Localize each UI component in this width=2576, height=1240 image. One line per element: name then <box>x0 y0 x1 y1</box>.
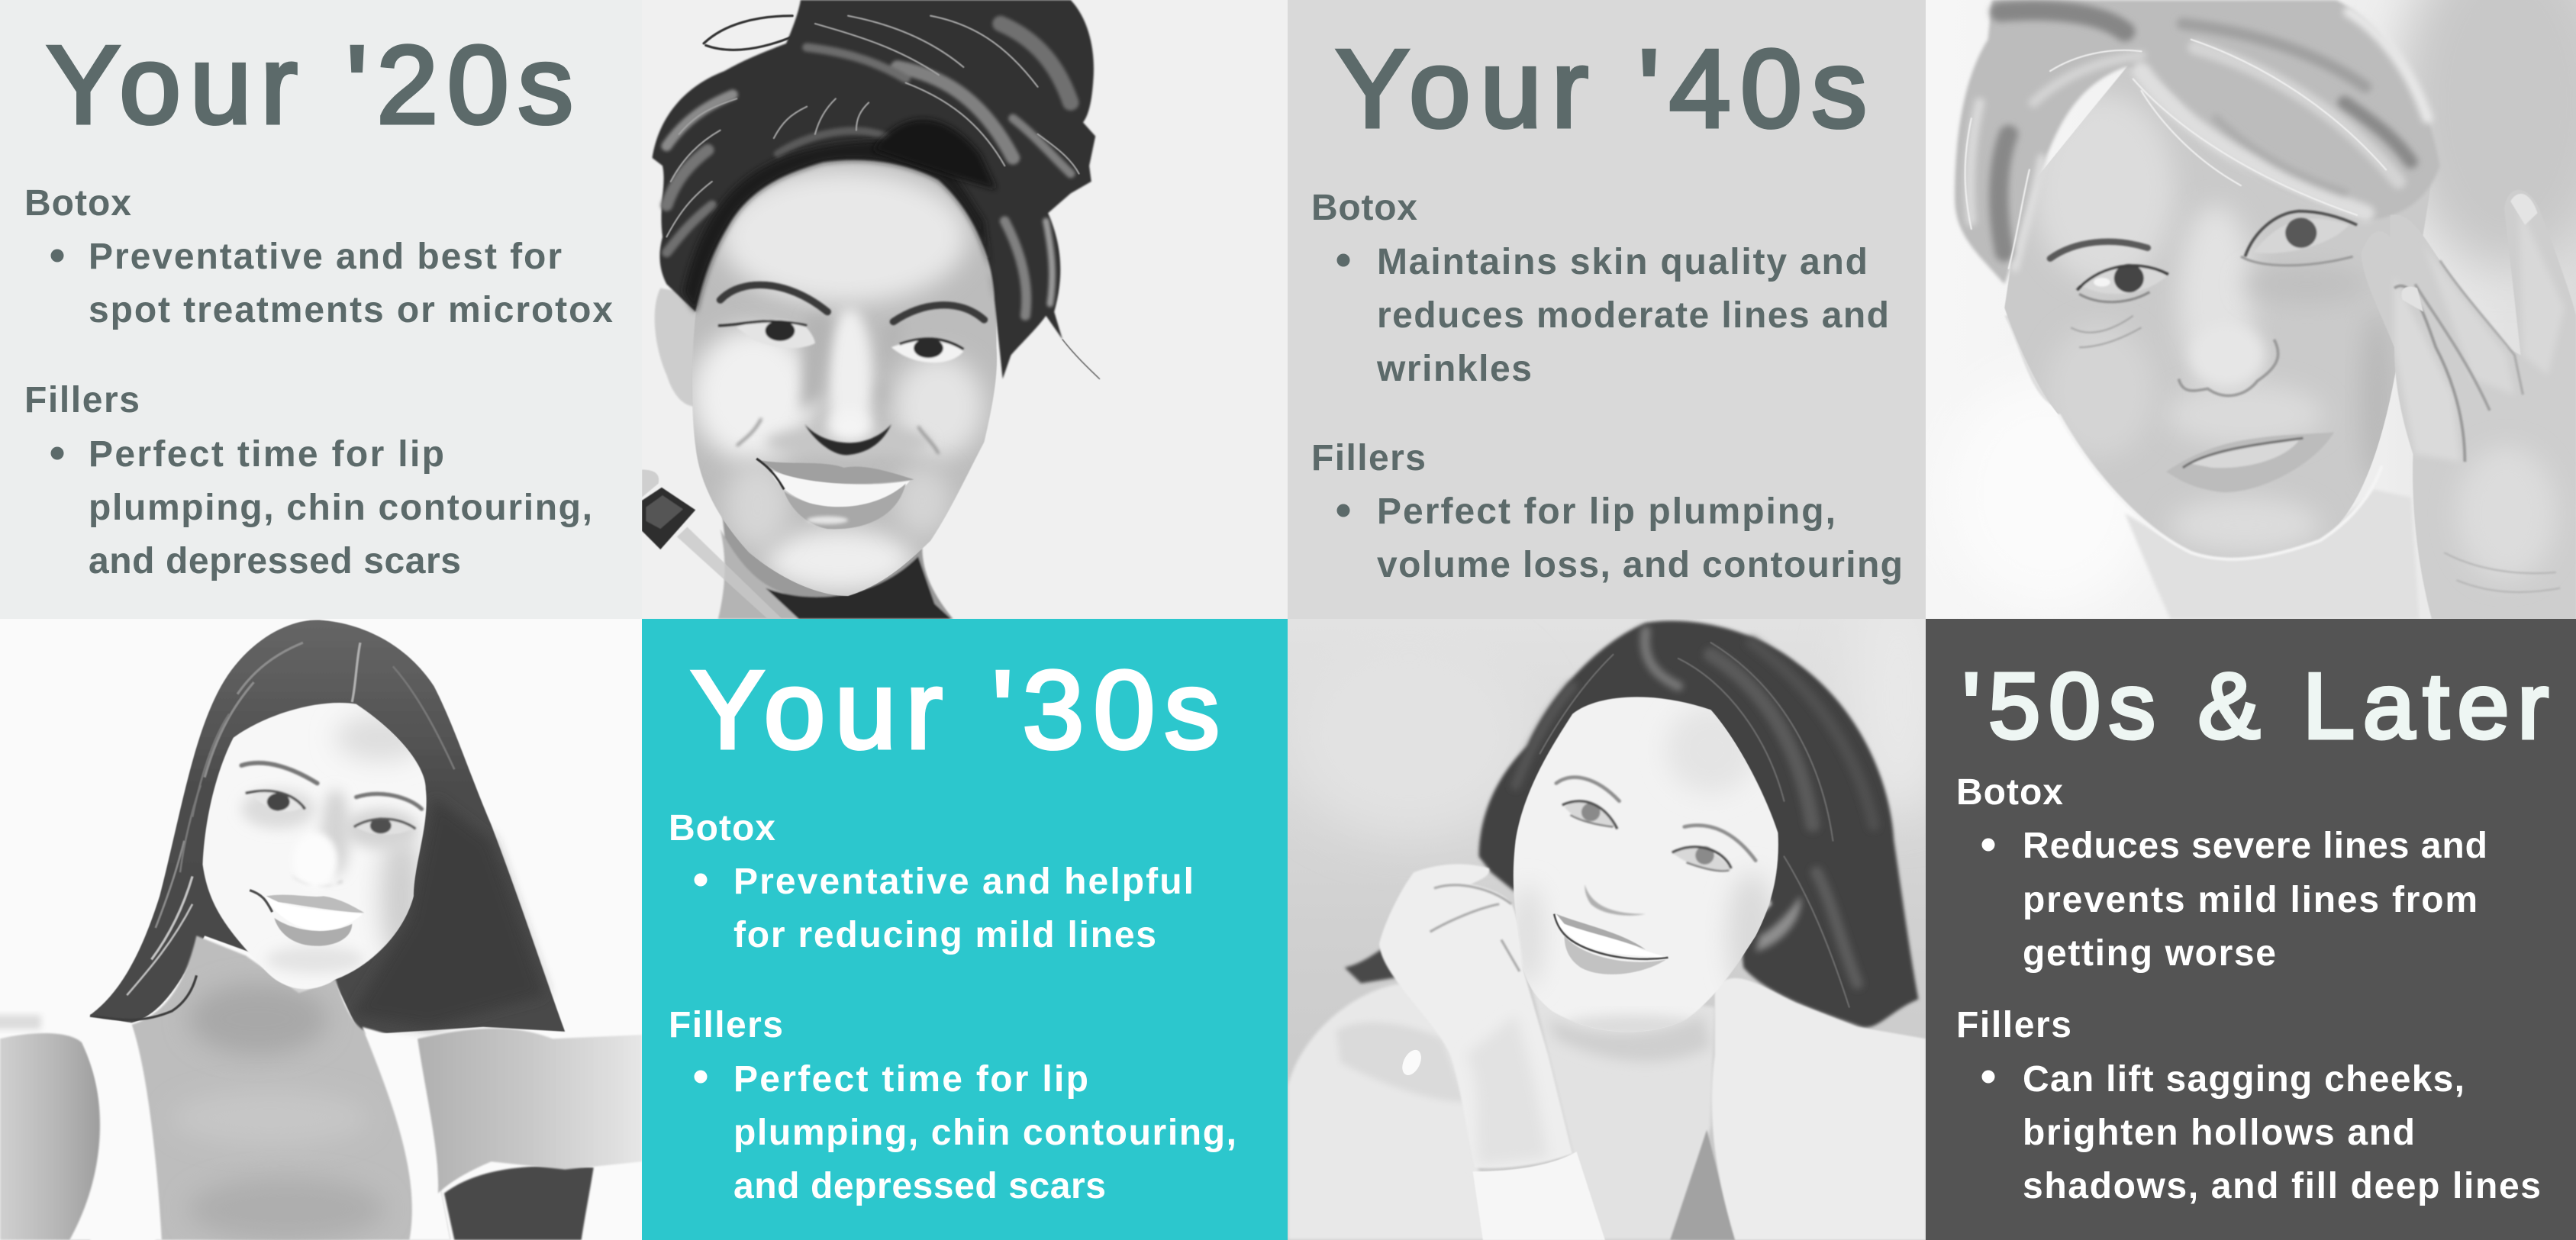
heading: Your '40s: Your '40s <box>1336 27 1867 150</box>
left arm <box>0 1033 103 1240</box>
patterned top <box>1670 1130 1735 1240</box>
Botox section: Preventative and best for <box>89 237 562 277</box>
Fillers section: Fillers <box>1956 1005 2071 1045</box>
eyes <box>246 791 415 835</box>
hand <box>2362 190 2576 619</box>
Fillers section <box>1956 1005 2541 1206</box>
eyes <box>1562 801 1731 871</box>
eyebrows <box>721 285 984 322</box>
raised hand <box>1379 864 1572 1168</box>
hair <box>1955 0 2440 284</box>
smile <box>756 459 914 529</box>
Botox section: prevents mild lines from <box>2023 880 2478 920</box>
face <box>1511 697 1778 1039</box>
Botox section: Botox <box>24 183 131 224</box>
eyebrows <box>241 763 421 809</box>
Botox section: Reduces severe lines and <box>2023 826 2487 866</box>
smile <box>1554 914 1668 974</box>
sweater cuff <box>1473 1151 1605 1240</box>
heading: Your '30s: Your '30s <box>691 648 1220 771</box>
photo: young woman with long straight hair <box>0 620 642 1240</box>
ear <box>655 288 704 407</box>
Fillers section: Perfect for lip plumping, <box>1377 491 1836 532</box>
Botox section: wrinkles <box>1376 349 1532 389</box>
panel: Your '40s <box>1288 0 1926 619</box>
Botox section: spot treatments or microtox <box>89 290 613 330</box>
panel: '50s & Later <box>1926 619 2576 1240</box>
panel: Your '20s <box>0 0 642 619</box>
Botox section <box>669 808 1194 955</box>
Fillers section <box>669 1005 1236 1206</box>
Fillers section: plumping, chin contouring, <box>733 1113 1236 1153</box>
tank top straps <box>69 1023 450 1240</box>
face <box>202 703 427 989</box>
ear <box>2004 312 2059 407</box>
neck <box>2125 489 2420 619</box>
cardigan left <box>1288 984 1605 1240</box>
Fillers section: volume loss, and contouring <box>1377 545 1903 585</box>
mouth <box>2166 432 2334 492</box>
nose <box>2178 324 2278 395</box>
hair wisp <box>1345 939 1410 984</box>
dropper <box>642 469 782 619</box>
neck <box>718 513 953 619</box>
eyes <box>2077 211 2357 302</box>
Botox section: getting worse <box>2023 933 2276 974</box>
Fillers section: brighten hollows and <box>2023 1113 2415 1153</box>
Fillers section: Fillers <box>669 1005 783 1045</box>
face <box>2004 40 2432 559</box>
long hair <box>90 620 565 1035</box>
face <box>692 159 997 596</box>
Fillers section: and depressed scars <box>89 541 461 581</box>
Fillers section: plumping, chin contouring, <box>89 488 592 528</box>
lower hand with ring <box>1336 1023 1467 1102</box>
Botox section: Botox <box>1311 188 1417 228</box>
hair bun <box>653 0 1100 379</box>
nose <box>1585 884 1646 916</box>
Fillers section: Fillers <box>1311 438 1426 478</box>
Fillers section: Perfect time for lip <box>733 1059 1088 1100</box>
Fillers section: Fillers <box>24 380 140 420</box>
photo: young woman with hair bun and dropper <box>642 0 2143 619</box>
Fillers section: and depressed scars <box>733 1166 1106 1206</box>
heading: Your '20s: Your '20s <box>47 23 573 147</box>
right arm <box>418 1029 642 1193</box>
Botox section: reduces moderate lines and <box>1377 295 1889 336</box>
Botox section <box>24 183 613 330</box>
Fillers section <box>24 380 592 581</box>
hair under arm <box>444 1166 594 1240</box>
nose <box>804 411 891 455</box>
neck <box>1532 987 1715 1240</box>
Botox section: Maintains skin quality and <box>1377 242 1868 282</box>
Fillers section: Perfect time for lip <box>89 434 444 475</box>
nose <box>291 833 342 888</box>
dark bob hair <box>1479 621 1918 1027</box>
Botox section <box>1956 772 2487 974</box>
Botox section: Botox <box>669 808 775 849</box>
Botox section: Preventative and helpful <box>733 862 1194 902</box>
eyes <box>718 319 963 362</box>
heading: '50s & Later: '50s & Later <box>1962 654 2549 758</box>
cardigan right <box>1712 978 1926 1240</box>
Fillers section: Can lift sagging cheeks, <box>2023 1059 2465 1100</box>
eyebrows <box>1556 778 1755 861</box>
Botox section <box>1311 188 1889 389</box>
photo: older woman with dark bob resting on her hand <box>1288 619 1926 1240</box>
chest and neck <box>90 936 450 1240</box>
eyebrow left <box>2050 242 2148 259</box>
panel: Your '30s <box>642 619 1288 1240</box>
Fillers section: shadows, and fill deep lines <box>2023 1166 2541 1206</box>
Fillers section <box>1311 438 1903 585</box>
Botox section: Botox <box>1956 772 2063 813</box>
Botox section: for reducing mild lines <box>733 915 1156 955</box>
smile <box>250 891 364 946</box>
photo: blonde woman touching her eye <box>1926 0 2576 619</box>
